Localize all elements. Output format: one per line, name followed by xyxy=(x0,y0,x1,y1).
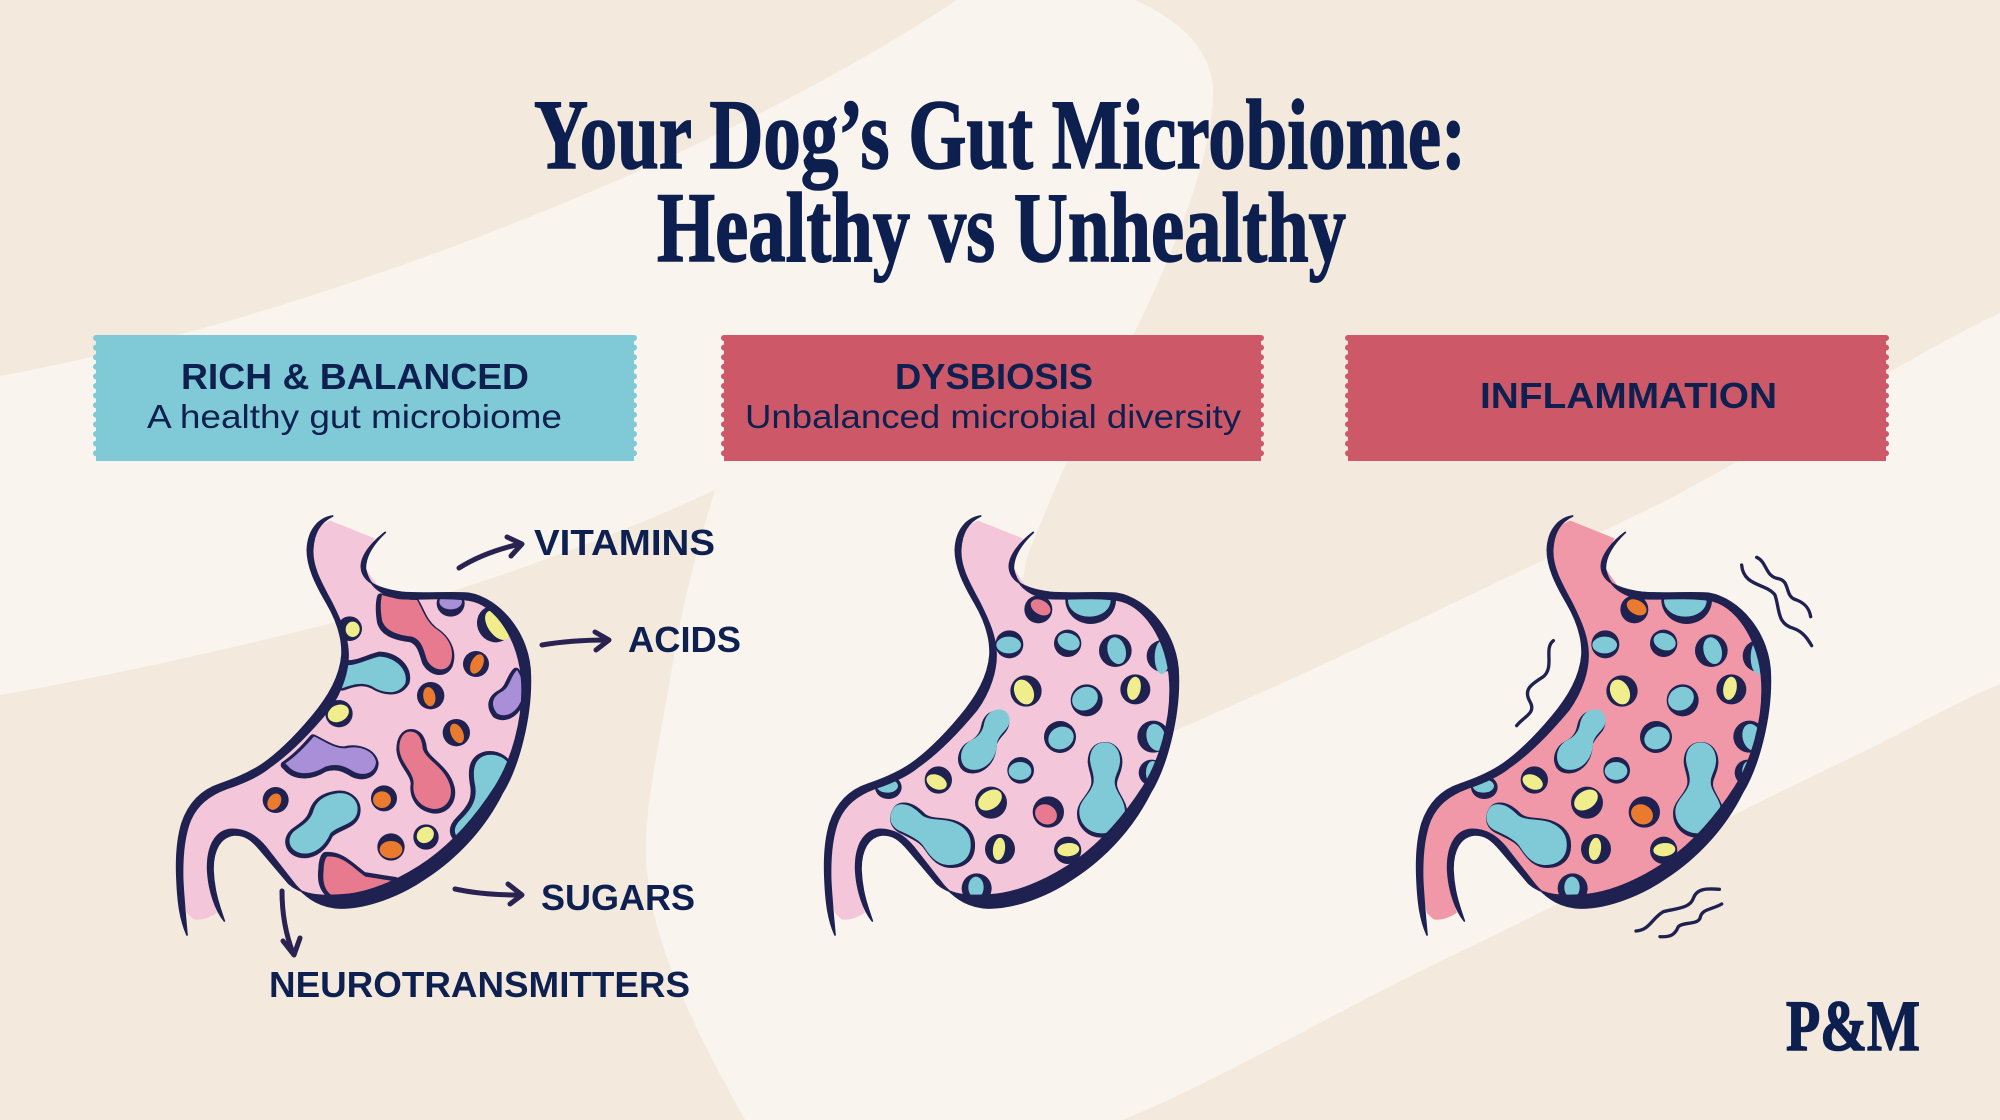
label: vitamins: VITAMINS xyxy=(534,522,715,563)
stomach: inflammation xyxy=(1417,516,1775,935)
banner: dysbiosis: DYSBIOSIS xyxy=(895,356,1093,397)
label: neurotransmitters: NEUROTRANSMITTERS xyxy=(269,964,690,1005)
banner: rich and balanced: A healthy gut microbiome xyxy=(147,398,562,435)
squiggles: inflammation irritation marks xyxy=(1517,557,1812,937)
label: sugars: SUGARS xyxy=(541,877,695,918)
title: Healthy vs Unhealthy xyxy=(657,172,1346,283)
banner: dysbiosis xyxy=(724,335,1261,461)
stomach: dysbiosis xyxy=(825,516,1179,935)
blobs: red, blue and purple bacteria xyxy=(284,595,523,898)
banner: dysbiosis: Unbalanced microbial diversity xyxy=(745,398,1242,435)
stomach: healthy, diverse microbiome xyxy=(177,516,530,935)
banner: inflammation xyxy=(1348,335,1886,461)
banner: rich and balanced xyxy=(96,335,634,461)
label: acids: ACIDS xyxy=(628,619,741,660)
arrow: to vitamins xyxy=(459,537,522,568)
arrow: to neurotransmitters xyxy=(282,891,300,955)
title xyxy=(534,79,1466,283)
arrow: to sugars xyxy=(455,884,522,904)
banner: rich and balanced: RICH & BALANCED xyxy=(181,356,529,397)
logo: P&M xyxy=(1786,986,1920,1066)
title: Your Dog’s Gut Microbiome: xyxy=(534,79,1466,190)
arrow: to acids xyxy=(542,632,609,650)
banner: inflammation: INFLAMMATION xyxy=(1480,375,1777,416)
